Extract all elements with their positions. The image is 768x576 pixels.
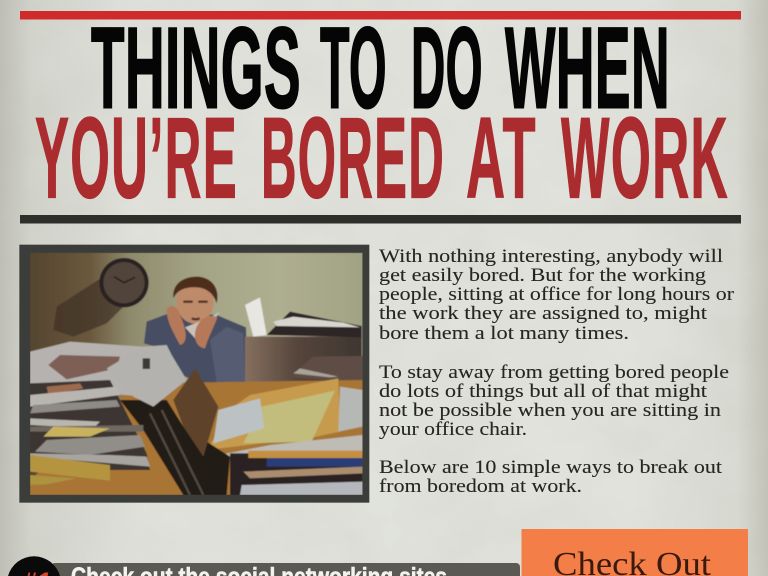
wall clock <box>99 258 149 307</box>
suit <box>144 312 247 386</box>
paragraph 3: Below are 10 simple ways to break out <box>379 457 723 478</box>
title line 1: DO <box>411 4 483 132</box>
central dark folder <box>120 400 230 495</box>
paragraph 1: people, sitting at office for long hours or <box>379 284 735 305</box>
desk <box>30 380 363 495</box>
dark rule <box>20 215 741 224</box>
books <box>295 356 363 380</box>
photo frame: bored office worker <box>19 245 369 503</box>
paragraph 1: bore them a lot many times. <box>379 323 629 344</box>
right papers <box>338 387 363 432</box>
folder <box>207 378 340 450</box>
paragraph 2 <box>379 362 729 440</box>
shirt <box>185 312 220 340</box>
title line 2: AT <box>466 94 537 222</box>
title line 1: THINGS <box>91 4 301 132</box>
file box <box>245 297 362 384</box>
paragraph 1: With nothing interesting, anybody will <box>379 246 723 267</box>
hair <box>173 277 218 303</box>
paragraph 2: To stay away from getting bored people <box>379 362 729 383</box>
crumpled paper <box>107 345 187 407</box>
head <box>176 286 214 324</box>
clock shadow <box>53 277 127 337</box>
paragraph 1: get easily bored. But for the working <box>379 265 707 286</box>
right hand <box>195 316 217 348</box>
tip 1 heading bar <box>51 563 520 576</box>
right lower stack <box>230 451 363 495</box>
title <box>35 4 729 222</box>
left paper pile <box>30 342 150 485</box>
paragraph 1 <box>379 246 735 344</box>
paragraph 2: not be possible when you are sitting in <box>379 400 722 421</box>
face shadows <box>183 302 208 319</box>
paragraph 2: do lots of things but all of that might <box>379 381 708 402</box>
title line 2: BORED <box>261 94 445 222</box>
top red rule <box>20 11 741 20</box>
title line 2 <box>35 94 729 222</box>
paragraph 3: from boredom at work. <box>379 476 582 497</box>
paragraph 3 <box>379 457 723 497</box>
yellow form <box>243 391 335 443</box>
wall <box>30 253 363 495</box>
intro text <box>379 246 735 497</box>
paragraph 2: your office chair. <box>379 419 527 440</box>
orange callout <box>522 529 748 576</box>
number badge <box>8 556 60 576</box>
small white paper <box>213 398 264 443</box>
worker <box>144 277 247 386</box>
left hand <box>167 306 186 345</box>
title line 2: YOU’RE <box>35 94 238 222</box>
paragraph 1: the work they are assigned to, might <box>379 303 708 324</box>
title line 1: TO <box>320 4 387 132</box>
